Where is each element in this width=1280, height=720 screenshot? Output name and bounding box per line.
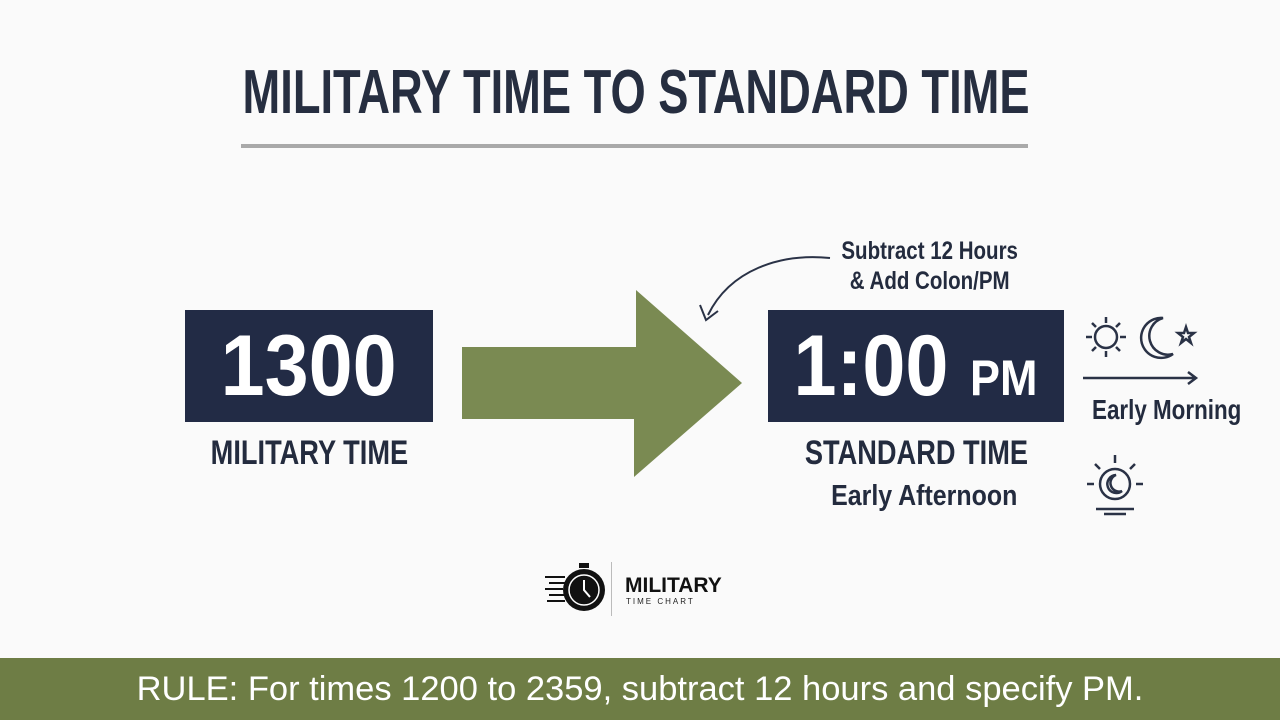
label: standard time: STANDARD TIME <box>804 434 1028 472</box>
logo: MILITARY <box>625 574 722 597</box>
arrow: conversion <box>462 290 742 477</box>
arrow: callout curve <box>699 256 830 322</box>
label: military time: MILITARY TIME <box>210 434 408 472</box>
footer: rule <box>0 658 1280 720</box>
logo: TIME CHART <box>626 597 695 606</box>
icon: sunrise moon <box>1087 455 1143 516</box>
label: early morning: Early Morning <box>1092 394 1241 425</box>
title: MILITARY TIME TO STANDARD TIME <box>242 58 1029 127</box>
box: standard time: 1:00 PM <box>794 318 1038 414</box>
box: military time: 1300 <box>221 318 397 414</box>
callout: subtract 12 hours <box>842 237 1018 295</box>
logo <box>545 562 722 616</box>
label: early afternoon: Early Afternoon <box>831 480 1017 512</box>
callout: subtract 12 hours: Subtract 12 Hours <box>842 237 1018 265</box>
icons: sun moon star <box>1083 316 1198 385</box>
callout: subtract 12 hours: & Add Colon/PM <box>850 267 1010 295</box>
box: military time <box>185 310 433 422</box>
footer: rule: RULE: For times 1200 to 2359, subtract 12 hours and specify PM. <box>137 670 1143 708</box>
